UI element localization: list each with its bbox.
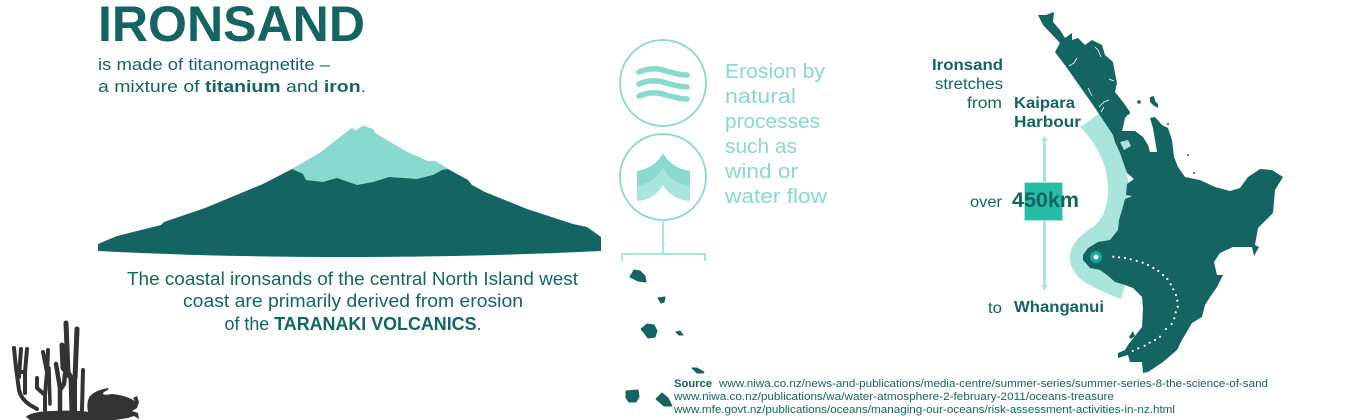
intro text: a mixture of titanium and iron . <box>98 77 366 96</box>
map: North Island <box>1038 12 1283 373</box>
distance arrow <box>1041 136 1048 291</box>
source text: www.niwa.co.nz/news-and-publications/media-centre/summer-series/summer-series-8-the-science-of-sand <box>718 378 1268 390</box>
map: ironsand coastal band <box>1070 113 1130 299</box>
map labels: to <box>988 300 1002 317</box>
map labels <box>932 57 1104 317</box>
connector bracket <box>622 220 705 261</box>
volcanics description: of the TARANAKI VOLCANICS. <box>224 314 482 334</box>
erosion text: wind or <box>724 161 798 183</box>
source text <box>673 378 1268 416</box>
erosion text: Erosion by <box>725 61 825 83</box>
icon: wind <box>620 40 706 126</box>
source text: www.mfe.govt.nz/publications/oceans/managing-our-oceans/risk-assessment-activities-in-nz.html <box>673 404 1175 416</box>
sand grains <box>626 270 704 406</box>
erosion text: such as <box>725 136 797 158</box>
map labels: 450km <box>1012 189 1079 212</box>
map labels: Harbour <box>1014 114 1081 131</box>
icon: water <box>620 134 706 220</box>
erosion text <box>724 61 828 208</box>
distance box <box>1024 182 1062 220</box>
map labels: Ironsand <box>932 57 1003 74</box>
erosion text: water flow <box>724 186 828 208</box>
source text: www.niwa.co.nz/publications/wa/water-atmosphere-2-february-2011/oceans-treasure <box>673 391 1114 403</box>
map labels: stretches <box>935 76 1003 93</box>
volcano illustration <box>98 126 601 257</box>
map labels: from <box>967 95 1002 112</box>
erosion text: processes <box>725 111 820 133</box>
erosion text: natural <box>725 86 796 108</box>
source text: Source <box>674 378 712 390</box>
map labels: over <box>970 194 1002 211</box>
intro text <box>98 55 366 96</box>
map labels: Kaipara <box>1014 95 1075 112</box>
volcanics description: The coastal ironsands of the central North Island west <box>127 269 578 289</box>
volcanics description: coast are primarily derived from erosion <box>183 291 523 311</box>
map labels: Whanganui <box>1014 299 1104 316</box>
silhouette: plants and crab <box>14 323 139 420</box>
map: volcano marker and dotted route <box>1090 251 1179 352</box>
intro text: is made of titanomagnetite – <box>98 55 331 74</box>
volcanics description <box>127 269 578 334</box>
